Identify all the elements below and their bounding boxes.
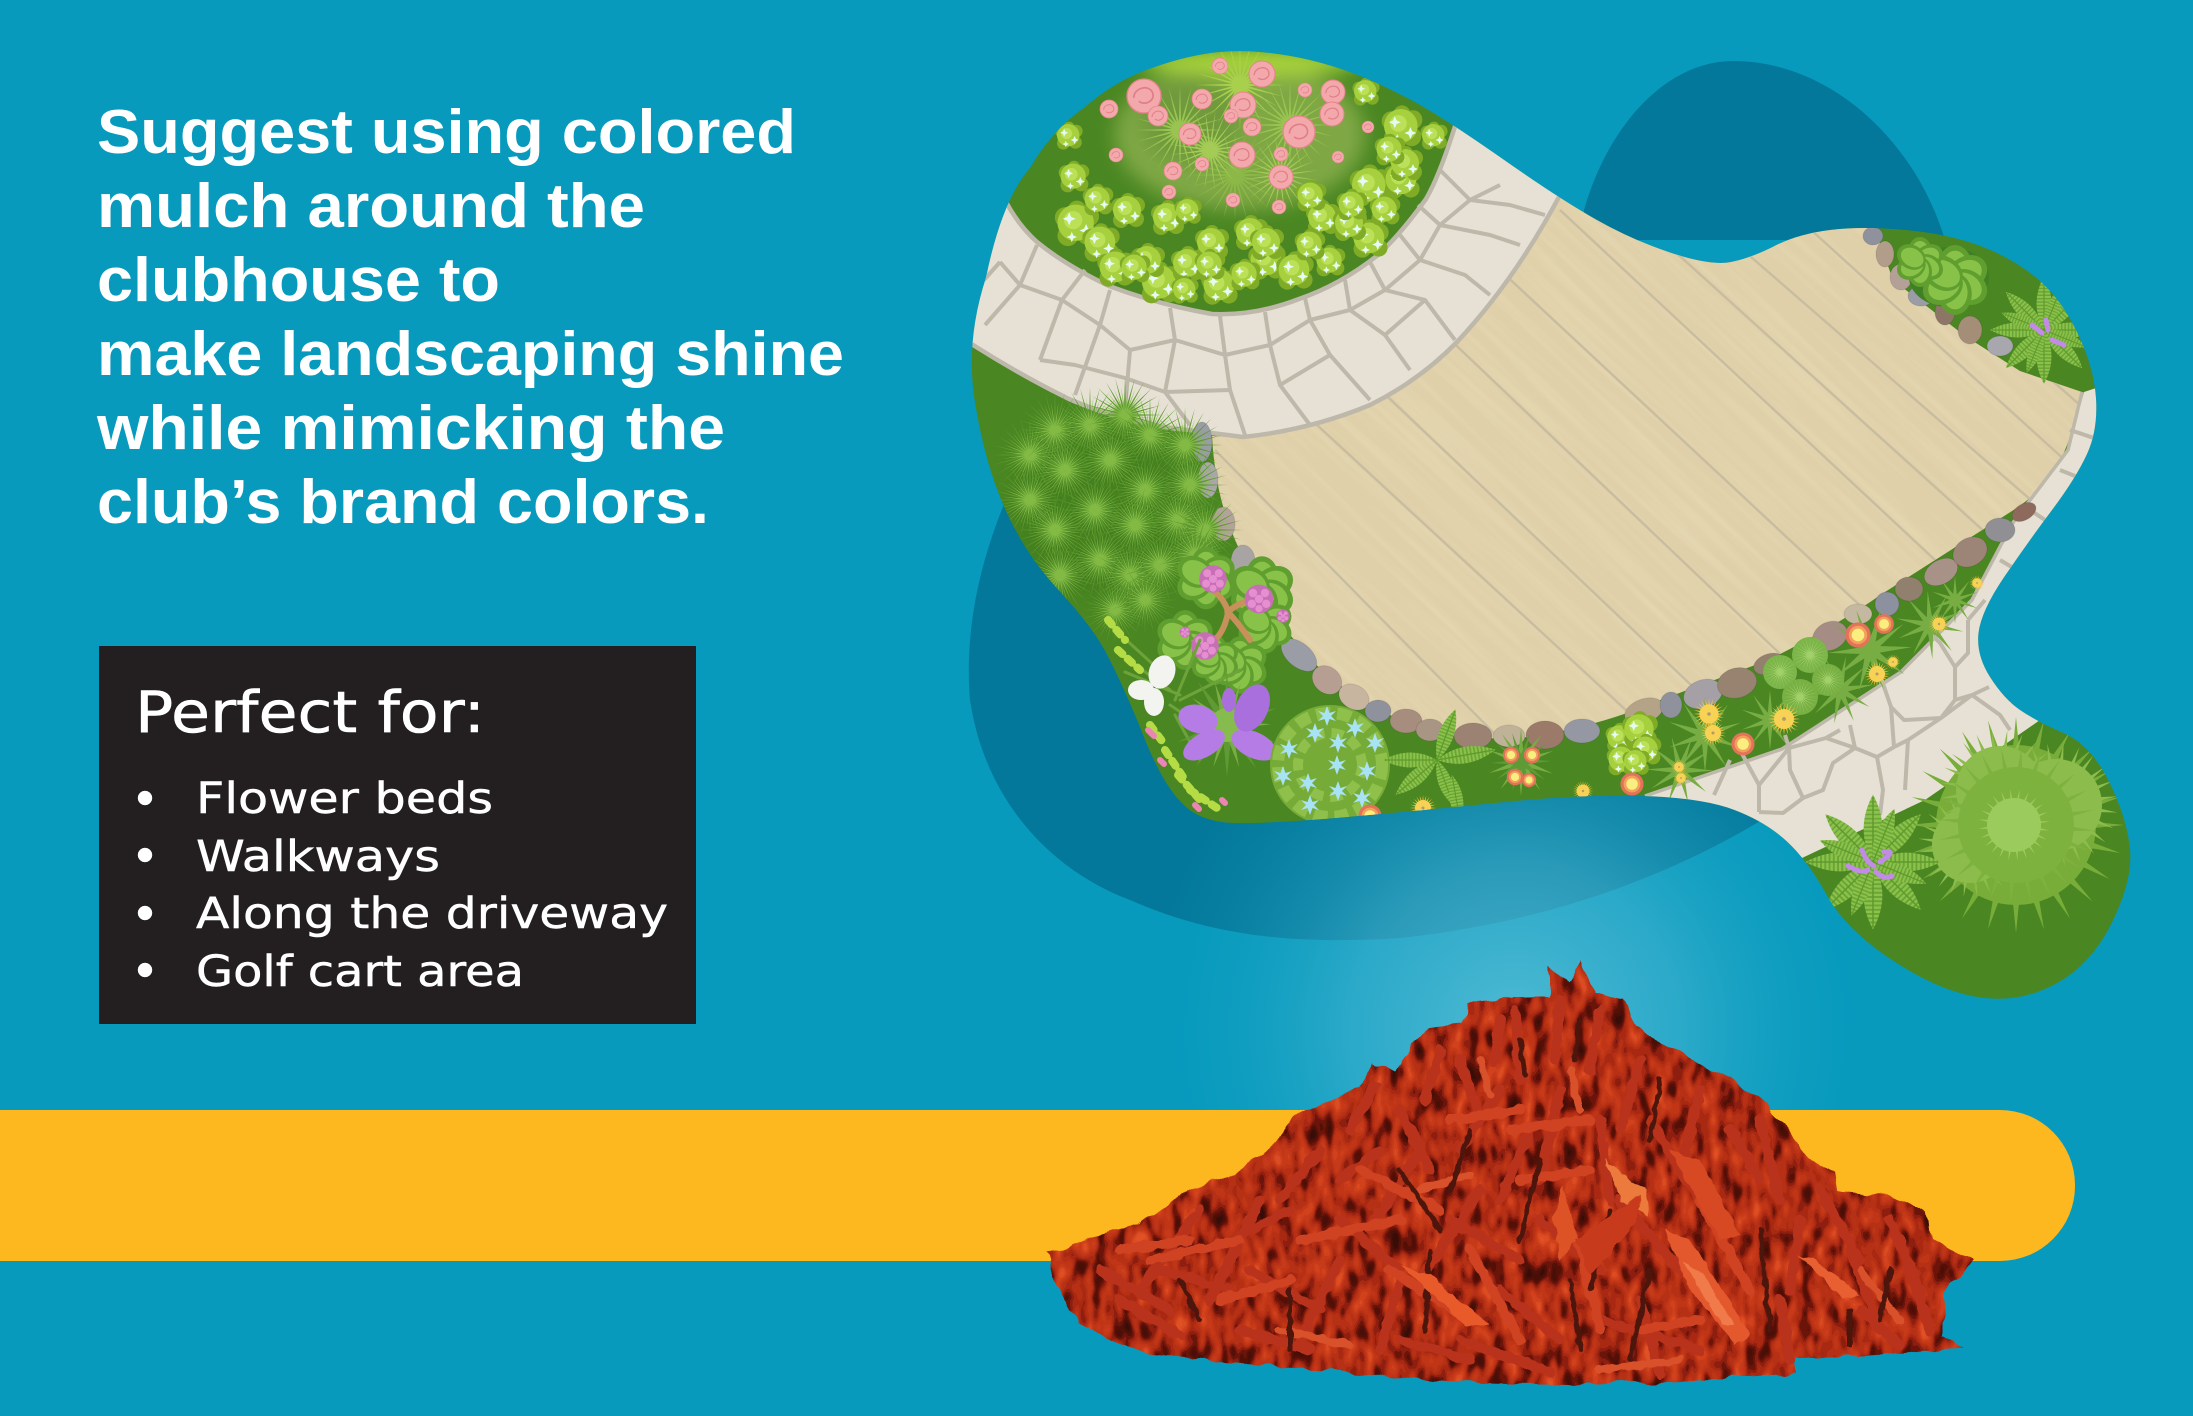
headline: clubhouse to (97, 246, 500, 315)
blue flower shrub (1270, 705, 1390, 825)
headline (96, 98, 844, 537)
dark teal blob behind garden (969, 61, 1945, 940)
headline: while mimicking the (96, 394, 725, 463)
mulch pile (1047, 960, 1971, 1385)
headline: club’s brand colors. (97, 468, 709, 537)
fern with purple flower, lower right (1806, 794, 1940, 930)
bullet list (138, 774, 668, 997)
bullet list: Golf cart area (196, 947, 524, 997)
flower bed: rose foliage and roses (1100, 40, 1374, 220)
headline: mulch around the (97, 172, 645, 241)
big round shrub (1908, 717, 2125, 933)
flower bed: lime shrubs with white flowers (1055, 78, 1448, 305)
edging stones (1192, 227, 2039, 749)
fir shrubs (992, 377, 1243, 644)
headline: make landscaping shine (97, 320, 844, 389)
purple flower (1178, 676, 1275, 774)
garden illustration (972, 51, 2130, 999)
grass and vines on the left edge (1108, 620, 1240, 810)
bullet list: Along the driveway (196, 889, 668, 939)
ferns along lower strip (1384, 709, 1496, 808)
light glow behind mulch (1100, 640, 1930, 1416)
lower walkway (1645, 380, 2120, 858)
orange flower clump (1490, 728, 1552, 795)
strip flowers and grasses (1358, 575, 1985, 828)
bullet list: Walkways (196, 832, 440, 882)
bullet list: Flower beds (196, 774, 493, 824)
stone path around top bed (950, 120, 1560, 437)
monstera and fern, upper right (1892, 237, 2098, 384)
yellow bar (0, 1110, 2075, 1261)
white flower (1128, 655, 1176, 716)
pink flowering shrub (1152, 547, 1299, 694)
panel: perfect for (99, 646, 696, 1024)
white-flower lime shrub (1606, 711, 1661, 776)
panel heading: Perfect for: (135, 680, 485, 746)
headline: Suggest using colored (97, 98, 796, 167)
wooden deck (1212, 198, 2082, 738)
